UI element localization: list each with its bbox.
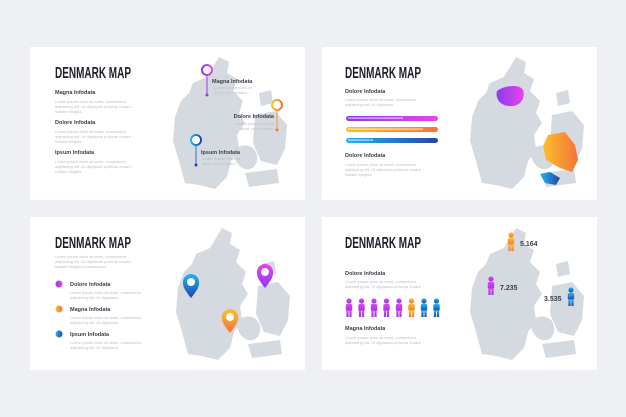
pin: blue TL: Ipsum Infodata	[201, 150, 241, 156]
title BR: DENMARK MAP	[345, 235, 421, 252]
map markers BR: 3.535	[544, 296, 562, 303]
text block BR: Dolore Infodata	[345, 271, 386, 277]
text block TR bottom: Nullam fringilla.	[345, 172, 372, 177]
text block TL: adipiscing elit. Ut dignissim pulvinar ornare.	[55, 164, 132, 169]
legend BL: adipiscing elit. Ut dignissim.	[70, 345, 119, 350]
text block BR: adipiscing elit. Ut dignissim pulvinar ornare.	[345, 284, 422, 289]
text intro BL: Nullam fringilla condimentum.	[55, 264, 107, 269]
text block TR bottom: Dolore Infodata	[345, 153, 386, 159]
pin: blue TL	[191, 135, 241, 166]
map markers BR: 5.164	[520, 241, 538, 248]
text block TL: Ipsum Infodata	[55, 150, 95, 156]
text block TR bottom: adipiscing elit. Ut dignissim pulvinar ornare.	[345, 167, 422, 172]
map markers BR: 7.235	[500, 285, 518, 292]
text block TL: Dolore Infodata	[55, 120, 96, 126]
text block TL: adipiscing elit. Ut dignissim pulvinar ornare.	[55, 104, 132, 109]
panel: bottom-right card	[322, 217, 597, 370]
pin: blue TL: Lorem ipsum dolor sit	[202, 156, 241, 161]
panel: bottom-left card	[30, 217, 305, 370]
title TR: DENMARK MAP	[345, 65, 421, 82]
pin: magenta TL: Lorem ipsum dolor sit	[214, 85, 253, 90]
text block TR bottom: Lorem ipsum dolor sit amet, consectetur	[345, 162, 417, 167]
bars	[346, 116, 438, 143]
pin: magenta TL: Magna Infodata	[212, 79, 253, 85]
legend BL: Lorem ipsum dolor sit amet, consectetur	[70, 290, 142, 295]
legend BL: adipiscing elit. Ut dignissim.	[70, 295, 119, 300]
map: Denmark TL	[173, 57, 287, 189]
pin: orange TL	[234, 100, 282, 132]
highlight regions	[497, 86, 578, 185]
text intro BL	[55, 254, 132, 269]
text block BR: Lorem ipsum dolor sit amet, consectetur	[345, 279, 417, 284]
text block BR bottom: Magna Infodata	[345, 326, 386, 332]
text block TL: adipiscing elit. Ut dignissim pulvinar ornare.	[55, 134, 132, 139]
text block TR bottom	[345, 153, 422, 177]
pins BL	[183, 264, 273, 333]
text intro BL: Lorem ipsum dolor sit amet, consectetur	[55, 254, 127, 259]
pin: orange TL: amet, cons ectetur.	[240, 126, 274, 131]
map markers BR	[488, 232, 574, 306]
map: Denmark TR	[470, 57, 584, 189]
legend BL: adipiscing elit. Ut dignissim.	[70, 320, 119, 325]
legend BL: Lorem ipsum dolor sit amet, consectetur	[70, 340, 142, 345]
legend BL	[56, 280, 142, 350]
panel: top-left card	[30, 47, 305, 200]
text block TL: Nullam fringilla.	[55, 139, 82, 144]
people row	[346, 298, 440, 317]
text block TL: Lorem ipsum dolor sit amet, consectetur	[55, 129, 127, 134]
legend BL: Magna Infodata	[70, 307, 111, 313]
text block TL: Nullam fringilla.	[55, 169, 82, 174]
text block TR top: Dolore Infodata	[345, 89, 386, 95]
legend BL: Ipsum Infodata	[70, 332, 110, 338]
text block TL: Lorem ipsum dolor sit amet, consectetur	[55, 99, 127, 104]
text intro BL: adipiscing elit. Ut dignissim pulvinar ornare.	[55, 259, 132, 264]
text block BR	[345, 271, 422, 289]
text block TL: Lorem ipsum dolor sit amet, consectetur	[55, 159, 127, 164]
legend BL: Dolore Infodata	[70, 282, 111, 288]
panel: top-right card	[322, 47, 597, 200]
pin: magenta TL: amet, cons ectetur.	[214, 90, 248, 95]
text block TL: Nullam fringilla.	[55, 109, 82, 114]
pin: orange TL: Dolore Infodata	[234, 114, 275, 120]
map: Denmark BL	[176, 228, 290, 360]
legend BL: Lorem ipsum dolor sit amet, consectetur	[70, 315, 142, 320]
text block TL	[55, 90, 132, 174]
title BL: DENMARK MAP	[55, 235, 131, 252]
text block BR bottom	[345, 326, 422, 345]
text block TR top: adipiscing elit. Ut dignissim.	[345, 102, 394, 107]
text block TL: Magna Infodata	[55, 90, 96, 96]
pin: magenta TL	[202, 65, 253, 96]
text block TR top: Lorem ipsum dolor sit amet, consectetur	[345, 97, 417, 102]
map: Denmark BR	[470, 228, 584, 360]
text block BR bottom: adipiscing elit. Ut dignissim pulvinar ornare.	[345, 340, 422, 345]
pin: orange TL: Lorem ipsum dolor sit	[236, 121, 275, 126]
text block BR bottom: Lorem ipsum dolor sit amet, consectetur	[345, 335, 417, 340]
text block TR top	[345, 89, 417, 107]
pin: blue TL: amet, cons ectetur.	[202, 161, 236, 166]
title TL: DENMARK MAP	[55, 65, 131, 82]
